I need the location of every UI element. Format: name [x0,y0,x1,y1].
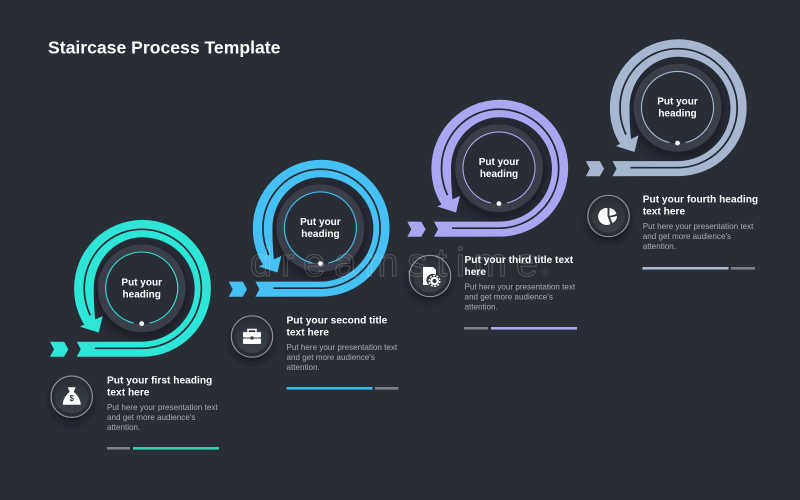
progress bar 2 [286,387,398,390]
step 1 text [107,376,218,432]
circular arrow [431,100,568,237]
centre label: Put your [121,277,162,288]
title: Staircase Process Template [48,38,281,58]
ring diagram 4: heading [658,109,697,120]
ring diagram 4 [586,39,747,176]
step 4 text [643,194,758,251]
step 2 text: and get more audience's [286,353,375,362]
centre label: Put your [657,97,698,108]
centre label: Put your [479,157,519,168]
icon: money bag [51,376,92,422]
watermark: ® [541,267,549,279]
watermark: dreamstime [250,241,538,285]
icon: money bag: $ [69,394,74,403]
step 3 text: Put here your presentation text [464,282,576,292]
step 1 [50,220,219,450]
step 2 text: Put here your presentation text [286,343,398,352]
step 2 text: text here [286,328,329,338]
step 2 text [286,316,398,372]
step 4 text: and get more audience's [643,232,731,241]
ring diagram 3: heading [480,169,518,180]
chevron [586,161,604,176]
chevron [50,342,68,357]
step 3 text: here [464,267,486,278]
ring diagram 1 [50,220,211,357]
step 4 text: Put here your presentation text [643,222,754,231]
chevron [229,282,247,297]
circular arrow [74,220,211,357]
progress bar 3 [464,327,577,330]
step 4 [586,39,758,270]
step 3 text [464,255,576,312]
step 1 text: attention. [107,423,140,432]
icon: document with gear [409,255,451,301]
step 4 text: text here [643,206,686,218]
ring diagram 1: heading [123,289,161,300]
icon: briefcase [231,316,273,362]
centre label: Put your [300,217,341,228]
ring diagram 2 [229,160,390,297]
ring diagram 3 [407,100,568,237]
step 3 text: attention. [464,302,498,312]
chevron [407,222,426,237]
step 2 [229,160,398,390]
step 4 text: attention. [643,242,676,251]
icon: pie chart [588,195,629,241]
step 1 text: and get more audience's [107,413,195,422]
step 1 text: text here [107,388,150,398]
step 3 text: and get more audience's [464,292,553,302]
ring diagram 2: heading [301,229,340,240]
progress bar 1 [107,447,219,450]
step 3 [407,100,577,330]
step 1 text: Put your first heading [107,376,212,386]
step 2 text: Put your second title [286,316,388,326]
progress bar 4 [642,267,755,270]
step 2 text: attention. [286,363,320,372]
step 1 text: Put here your presentation text [107,403,218,412]
circular arrow [253,160,390,297]
circular arrow [610,39,747,176]
step 3 text: Put your third title text [464,255,574,266]
step 4 text: Put your fourth heading [643,194,758,206]
